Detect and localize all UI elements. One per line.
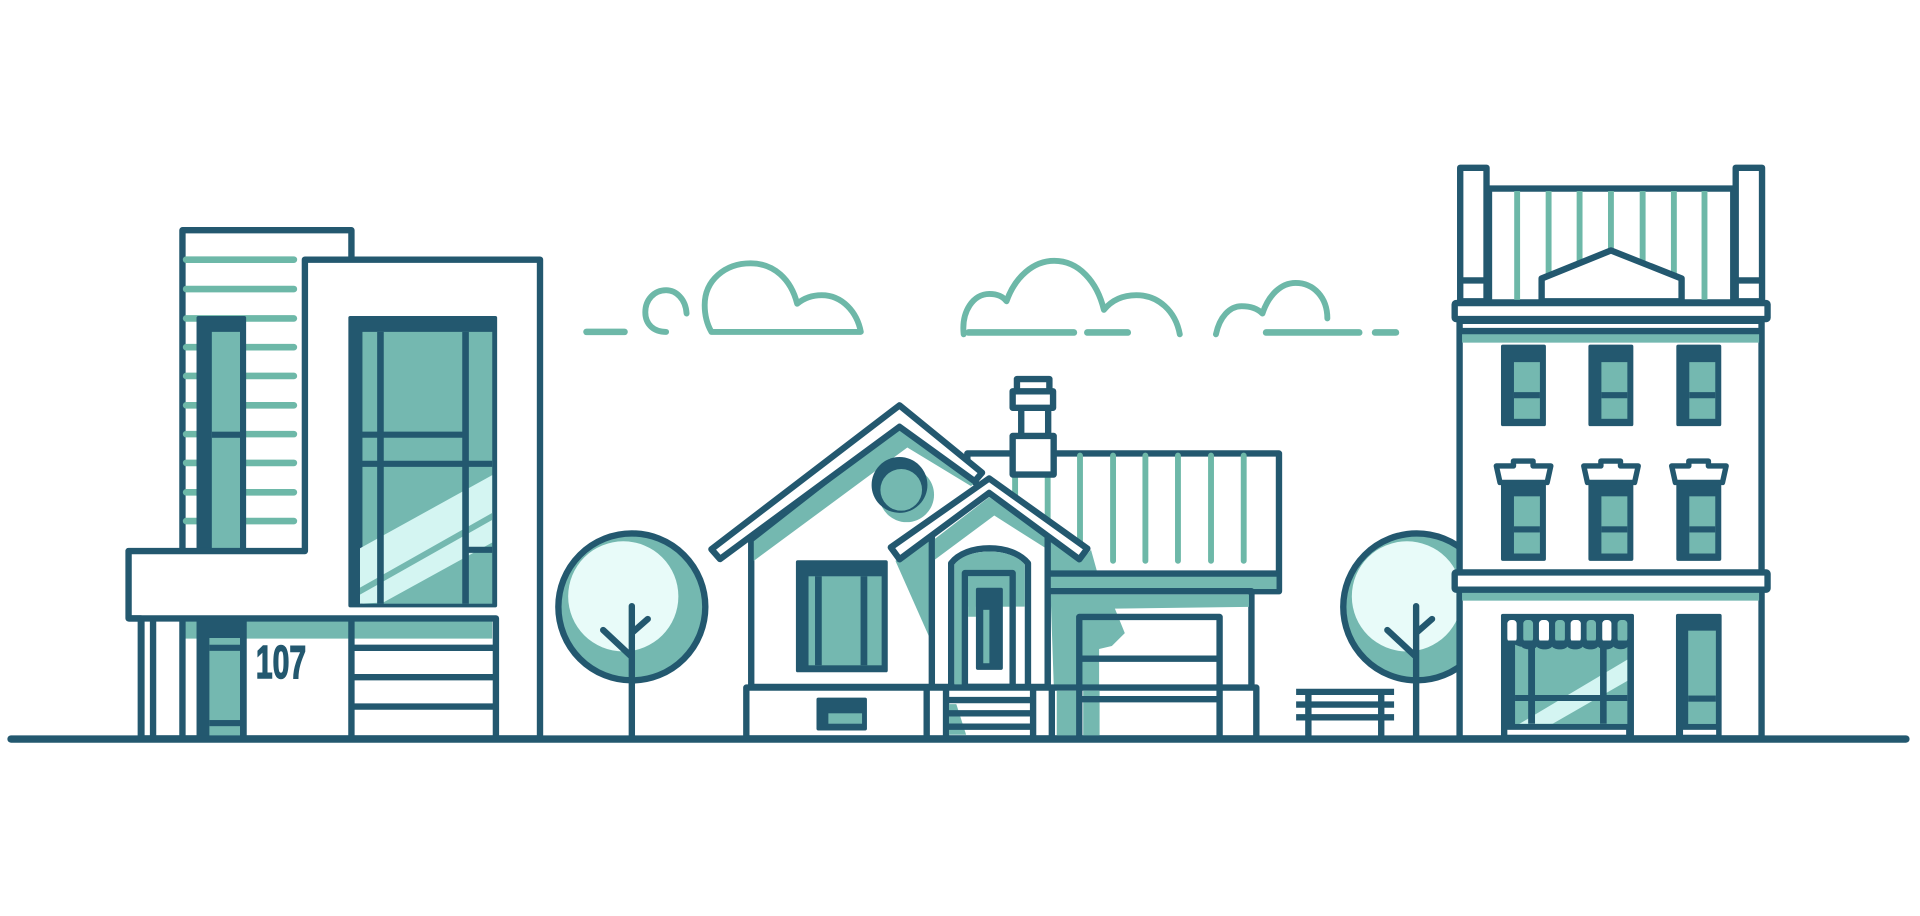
left parapet post — [1460, 168, 1487, 301]
ground floor — [129, 618, 496, 738]
clouds — [587, 261, 1396, 334]
front door — [197, 618, 247, 738]
chimney — [1013, 379, 1054, 475]
facade — [1460, 321, 1762, 738]
upper window 2 — [1588, 345, 1633, 426]
porch — [895, 492, 1048, 687]
middle window 1 — [1496, 461, 1551, 561]
porch roof — [891, 478, 1087, 559]
building: gabled house — [711, 379, 1279, 739]
steps — [946, 700, 1033, 735]
base — [746, 687, 1256, 738]
upper windows — [1501, 345, 1721, 426]
tree right — [1343, 533, 1490, 738]
awning — [1504, 620, 1629, 649]
roof wall — [1489, 189, 1733, 302]
big window — [348, 316, 497, 607]
narrow window — [197, 316, 246, 554]
main roof — [711, 405, 982, 559]
rear tower — [182, 230, 351, 554]
front block — [129, 260, 540, 738]
door — [951, 548, 1028, 687]
building: townhouse — [1455, 168, 1768, 739]
right parapet post — [1735, 168, 1763, 301]
building: modern house 107 — [129, 230, 540, 738]
house number: 107 — [256, 636, 306, 688]
middle window 3 — [1672, 461, 1726, 561]
shop window — [1501, 614, 1634, 739]
upper window 1 — [1501, 345, 1546, 426]
tree left — [558, 533, 705, 738]
main window — [796, 560, 888, 672]
ground line — [11, 736, 1906, 742]
pediment — [1542, 250, 1682, 301]
cloud left — [587, 263, 861, 332]
illustration: street of houses — [7, 164, 1910, 743]
garage roof — [967, 453, 1279, 591]
basement vent — [816, 698, 867, 730]
upper window 3 — [1676, 345, 1721, 426]
garage wall — [1048, 591, 1251, 739]
main wall — [751, 426, 978, 687]
mid cornice — [1455, 572, 1768, 590]
shop door — [1676, 614, 1722, 739]
top cornice — [1455, 303, 1768, 319]
middle windows — [1496, 461, 1726, 561]
garage door — [1079, 617, 1220, 738]
round window — [872, 457, 927, 513]
bench — [1296, 689, 1394, 738]
cloud middle — [963, 261, 1180, 334]
cloud right — [1216, 283, 1396, 334]
middle window 2 — [1584, 461, 1638, 561]
